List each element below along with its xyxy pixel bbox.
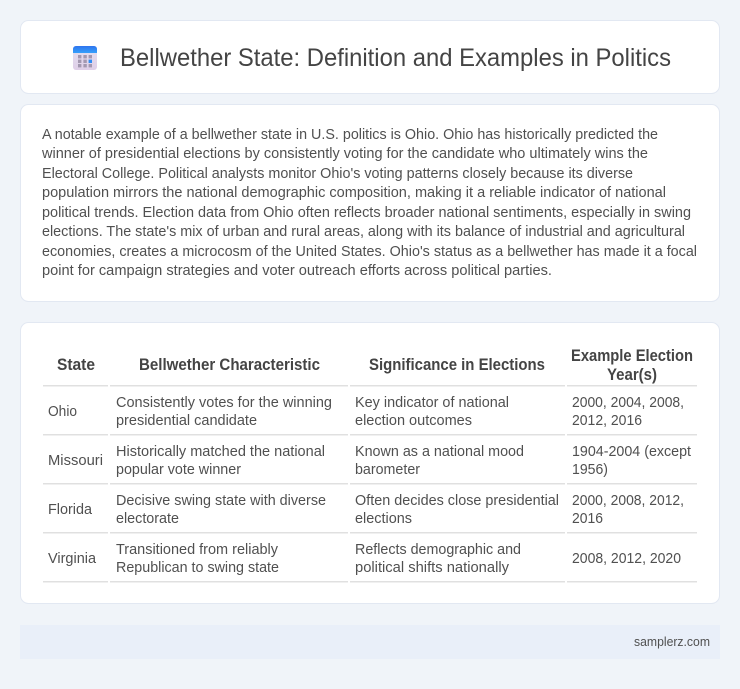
text block: paragraph: A notable example of a bellwether state in U.S. politics is Ohio. Ohio has historically predicted the <box>42 127 658 143</box>
table row: Ohio: Key indicator of national <box>355 395 509 411</box>
text block: paragraph: political trends. Election data from Ohio often reflects broader national sentiments, especially in swing <box>42 205 691 221</box>
table row: Virginia: Transitioned from reliably <box>116 542 279 558</box>
table row: Missouri: popular vote winner <box>116 462 241 478</box>
table row: Virginia: Reflects demographic and <box>355 542 521 558</box>
table row: Ohio: 2012, 2016 <box>572 413 642 429</box>
table row: Missouri: 1904-2004 (except <box>572 444 691 460</box>
table row: Ohio: presidential candidate <box>116 413 257 429</box>
table row: Ohio: Consistently votes for the winning <box>116 395 332 411</box>
text block: paragraph: population mirrors the national demographic composition, making it a reliable indicator of national <box>42 185 666 201</box>
footer text: samplerz.com <box>634 634 710 649</box>
table row: Virginia: political shifts nationally <box>355 560 510 576</box>
table row: Florida: Often decides close presidential <box>355 493 559 509</box>
text block: paragraph: winner of presidential elections by consistently voting for the candidate who ultimately wins the <box>41 146 648 162</box>
text block: paragraph <box>41 127 697 279</box>
table row: Florida: Decisive swing state with diverse <box>116 493 326 509</box>
text block: paragraph: point for campaign strategies and voter outreach efforts across political parties. <box>42 263 552 279</box>
table row: Virginia: Virginia <box>48 551 97 567</box>
table header row: Bellwether Characteristic <box>139 356 320 374</box>
header panel <box>20 20 720 94</box>
table header row: Significance in Elections <box>369 356 545 374</box>
table row: Florida: Florida <box>48 502 93 518</box>
table row: Missouri: barometer <box>355 462 420 478</box>
panel: table <box>20 322 720 604</box>
table row: Florida: elections <box>355 511 412 527</box>
table row: Florida: 2016 <box>572 511 603 527</box>
table header row: State <box>57 356 95 374</box>
icon: calendar <box>73 46 97 70</box>
table row: Missouri: Known as a national mood <box>355 444 524 460</box>
table row: Missouri: Missouri <box>48 453 103 469</box>
table row: Missouri: 1956) <box>572 462 608 478</box>
table row: Ohio <box>48 395 684 429</box>
table row: Florida: electorate <box>116 511 179 527</box>
table row: Virginia <box>48 542 681 576</box>
table header row: Year(s) <box>607 366 657 384</box>
footer <box>20 625 720 659</box>
table row: Virginia: Republican to swing state <box>116 560 279 576</box>
title: Bellwether State: Definition and Examples in Politics <box>120 45 671 72</box>
text block: paragraph: economies, creates a microcosm of the United States. Ohio's status as a bellwether has made it a focal <box>42 244 697 260</box>
table row: Ohio: Ohio <box>48 404 77 420</box>
table row: Florida <box>48 493 684 527</box>
text block: paragraph: elections. The state's mix of urban and rural areas, along with its balance of industrial and agricultural <box>42 224 685 240</box>
table row: Florida: 2000, 2008, 2012, <box>572 493 684 509</box>
table row: Ohio: 2000, 2004, 2008, <box>572 395 684 411</box>
table header row: Example Election <box>571 347 693 365</box>
table row: Ohio: election outcomes <box>355 413 472 429</box>
table row: Virginia: 2008, 2012, 2020 <box>572 551 681 567</box>
table row: Missouri <box>48 444 691 478</box>
table header row <box>57 347 693 384</box>
text block: paragraph: Electoral College. Political analysts monitor Ohio's voting patterns closely because its diverse <box>42 166 633 182</box>
panel: description paragraph <box>20 104 720 302</box>
table row: Missouri: Historically matched the national <box>116 444 325 460</box>
